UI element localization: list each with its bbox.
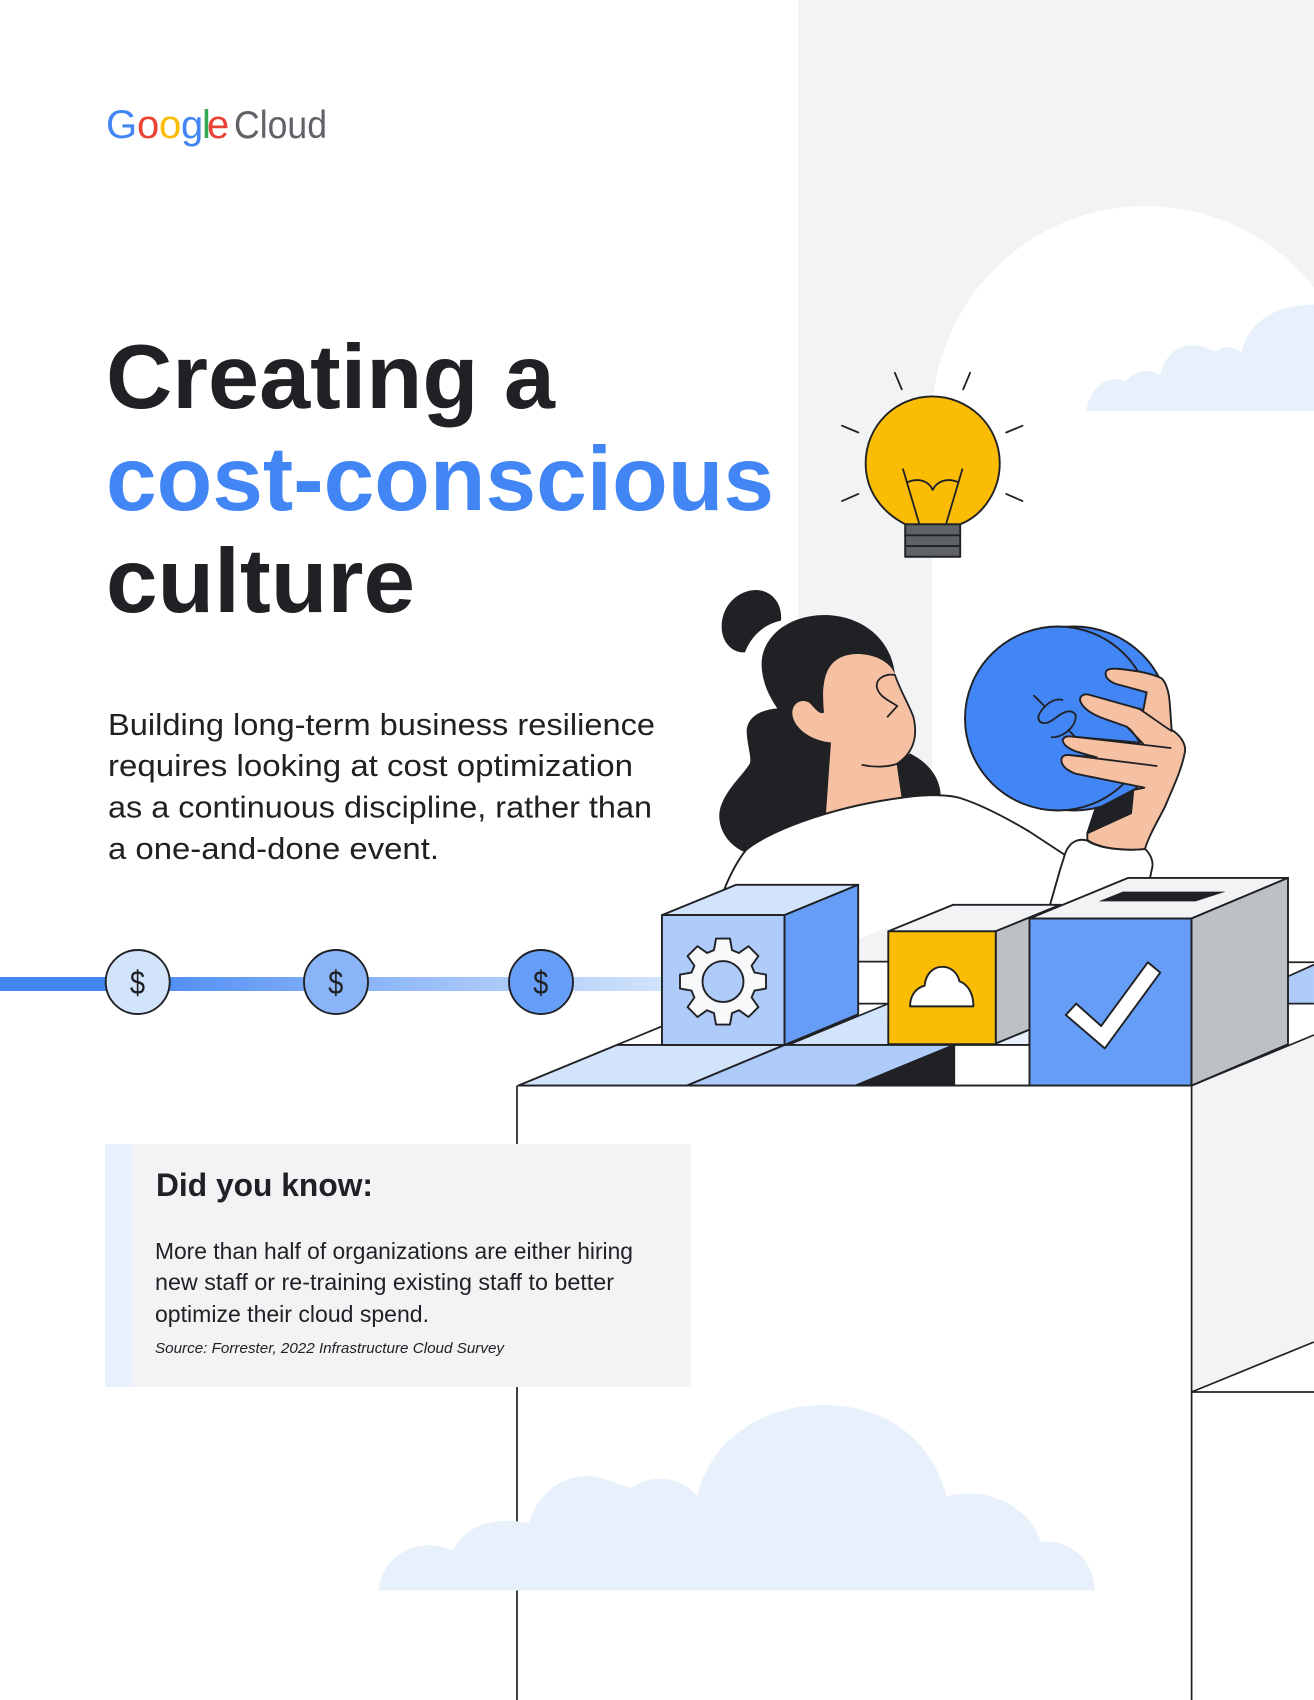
icon: gear — [680, 939, 766, 1025]
check block — [1029, 878, 1288, 1086]
title: culture — [106, 531, 415, 632]
front row tiles — [518, 1045, 1035, 1086]
background panel with arch — [798, 0, 1314, 1020]
dollar coin 2: $ — [328, 964, 343, 1001]
dollar coin 1 — [106, 950, 170, 1014]
callout heading: Did you know: — [156, 1167, 373, 1203]
person — [719, 590, 1185, 950]
logo: Google Cloud: g — [181, 103, 203, 147]
intro text — [108, 707, 655, 866]
coin dollar sign — [1034, 696, 1076, 737]
gear block — [662, 885, 858, 1045]
intro text: requires looking at cost optimization — [108, 748, 633, 783]
title: cost-conscious — [106, 429, 774, 530]
callout body: optimize their cloud spend. — [155, 1301, 429, 1327]
callout body — [155, 1238, 633, 1327]
logo: Google Cloud: o — [159, 103, 181, 147]
face and neck — [792, 654, 915, 813]
logo: Google Cloud — [106, 103, 327, 147]
callout source: Source: Forrester, 2022 Infrastructure Cloud Survey — [155, 1340, 506, 1357]
callout: did you know — [105, 1144, 691, 1387]
coin — [965, 626, 1169, 810]
dollar coin 2 — [304, 950, 368, 1014]
logo: Google Cloud: o — [137, 103, 159, 147]
dollar coin 3: $ — [533, 964, 548, 1001]
lightbulb — [842, 373, 1023, 557]
dollar coin 1: $ — [130, 964, 145, 1001]
hand — [1061, 669, 1185, 850]
coin shadow under hand — [1087, 790, 1133, 833]
dollar coin 3 — [509, 950, 573, 1014]
title — [106, 327, 774, 632]
intro text: as a continuous discipline, rather than — [108, 790, 652, 824]
logo: Google Cloud: l — [202, 103, 211, 147]
cloud: top right — [1086, 305, 1314, 411]
logo: Google Cloud: Cloud — [234, 104, 327, 147]
hair — [719, 590, 941, 852]
cloud: bottom — [378, 1405, 1095, 1591]
intro text: a one-and-done event. — [108, 831, 439, 866]
sleeve — [1050, 840, 1153, 905]
yellow cloud block — [888, 905, 1061, 1044]
intro text: Building long-term business resilience — [108, 707, 655, 742]
hand and sleeve — [1034, 669, 1185, 905]
callout body: new staff or re-training existing staff to better — [155, 1269, 614, 1295]
logo: Google Cloud: G — [106, 103, 137, 147]
title: Creating a — [106, 327, 556, 428]
logo: Google Cloud: e — [207, 103, 229, 147]
back row tiles — [617, 927, 1314, 1045]
shirt — [724, 795, 1070, 950]
big box: front and side — [517, 1035, 1314, 1700]
timeline bar — [0, 977, 664, 991]
callout body: More than half of organizations are either hiring — [155, 1238, 633, 1264]
platform with blocks — [518, 878, 1314, 1086]
